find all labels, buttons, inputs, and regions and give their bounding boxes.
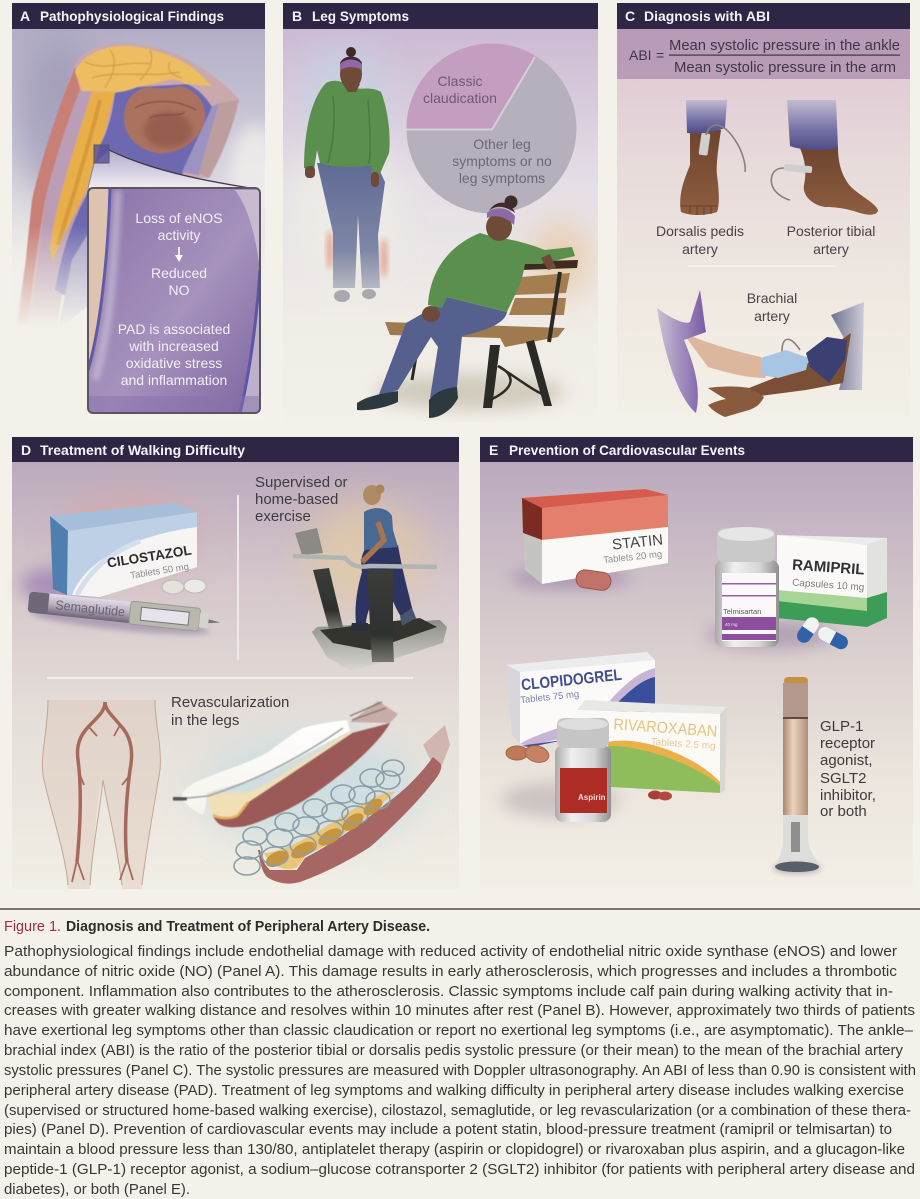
label: brachial artery: artery [754,308,790,324]
illustration: clopidogrel box [506,652,655,765]
formula: ABI: = [656,47,664,63]
caption body: creases with greater walking distance and resolves within 10 minutes after rest (Panel B). However, approximately two thirds of patients [4,1002,915,1019]
heading: panel D: Treatment of Walking Difficulty [40,442,245,458]
heading: panel B [283,3,598,29]
labels: ankle arteries: artery [813,241,849,257]
pie chart: leg symptom share: symptoms or no [452,153,552,169]
pie chart: leg symptom share: claudication [423,90,497,106]
caption body: Pathophysiological findings include endothelial damage with reduced activity of endothelial nitric oxide synthase (eNOS) and lower [4,943,897,960]
illustration: legs with arteries [42,700,160,889]
heading: panel C: Diagnosis with ABI [644,8,770,24]
illustration: bench [385,260,578,408]
labels: ankle arteries: Posterior tibial [787,223,875,239]
label: brachial artery [747,290,797,324]
text: inset pathway: with increased [128,338,219,354]
text: inset pathway: PAD is associated [118,321,230,337]
heading: panel E: E [489,442,498,458]
caption body: maintain a blood pressure less than 130/80, antiplatelet therapy (aspirin or clopidogrel) or rivaroxaban plus aspirin, and a glucagon-like [4,1141,905,1158]
illustration: standing woman walking [304,47,390,302]
illustration: injection pen [773,677,821,874]
illustration: cilostazol box: CILOSTAZOL [106,542,193,571]
caption body [4,943,916,1198]
illustration: cilostazol box: Tablets 50 mg [130,561,190,582]
caption body: have exertional leg symptoms other than classic claudication or report no exertional leg symptoms (i.e., are asymptomatic). The ankle– [4,1022,914,1039]
text: inset pathway [118,210,230,388]
heading: panel C [617,3,910,29]
illustration: clopidogrel box: Tablets 75 mg [520,689,580,706]
labels: ankle arteries [656,223,875,257]
pie chart: leg symptom share: leg symptoms [459,170,545,186]
heading: panel B: Leg Symptoms [312,8,409,24]
illustration: rivaroxaban box: Tablets 2.5 mg [650,737,716,752]
panel: E prevention of cardiovascular events [480,437,913,889]
label: exercise: exercise [255,508,311,525]
text: inset pathway: Reduced [151,265,207,281]
illustration: clopidogrel box: CLOPIDOGREL [520,667,623,694]
caption body: component. Inflammation also contributes to the atherosclerosis. Classic symptoms include calf pain during walking activity that in- [4,983,893,1000]
heading: panel A [12,3,265,29]
text: inset pathway: and inflammation [121,372,227,388]
caption body: systolic pressures (Panel C). The systolic pressures are measured with Doppler ultrasonography. An ABI of less than 0.90 is consistent with [4,1062,916,1079]
callout: magnified inset [88,188,260,413]
illustration: statin box: Tablets 20 mg [603,549,663,566]
illustration: dorsalis pedis ankle [680,100,745,215]
caption body: brachial index (ABI) is the ratio of the posterior tibial or dorsalis pedis systolic pressure (or their mean) to the mean of the brachial artery [4,1042,903,1059]
caption body: (supervised or structured home-based walking exercise), cilostazol, semaglutide, or leg revascularization (or a combination of these thera- [4,1102,911,1119]
label: GLP-1: SGLT2 [820,770,866,787]
heading: panel E: Prevention of Cardiovascular Events [509,442,745,458]
label: GLP-1: receptor [820,735,875,752]
illustration: telmisartan bottle: 40 mg [725,622,738,627]
illustration: ramipril box [777,535,887,627]
illustration: semaglutide pen: Semaglutide [55,597,126,619]
illustration: aspirin bottle [555,718,611,822]
label: revascularization [171,694,289,729]
illustration: aspirin bottle: Aspirin [578,793,606,802]
illustration: brachial cuff measurement [657,290,864,417]
illustration: treadmill with woman [293,484,447,671]
label: brachial artery: Brachial [747,290,797,306]
text: inset pathway: oxidative stress [126,355,222,371]
label: revascularization: Revascularization [171,694,289,711]
labels: ankle arteries: Dorsalis pedis [656,223,744,239]
caption body: peptide-1 (GLP-1) receptor agonist, a sodium–glucose cotransporter 2 (SGLT2) inhibitor (for patients with peripheral artery disease and [4,1161,915,1178]
label: GLP-1: or both [820,803,867,820]
caption body: peripheral artery disease (PAD). Treatment of leg symptoms and walking difficulty in peripheral artery disease includes walking exercise [4,1082,904,1099]
formula: ABI [617,29,910,79]
caption body: abundance of nitric oxide (NO) (Panel A). This damage results in early atherosclerosis, which progresses and includes a thrombotic [4,963,898,980]
label: GLP-1 [820,718,876,820]
formula: ABI: Mean systolic pressure in the arm [674,60,896,76]
panel: B leg symptoms [283,3,598,422]
illustration: cilostazol box [50,503,206,597]
icon: capsules [794,615,850,652]
text: inset pathway: activity [158,227,200,243]
heading: panel E [480,437,913,462]
illustration: rivaroxaban box [577,700,727,800]
caption title: Figure 1. [4,918,61,935]
pie chart: leg symptom share: Classic [437,73,483,89]
text: inset pathway: NO [168,282,190,298]
caption body: diabetes), or both (Panel E). [4,1181,190,1198]
illustration: telmisartan bottle [715,527,779,647]
heading: panel A: A [20,8,30,24]
illustration: telmisartan bottle: Telmisartan [723,607,761,616]
label: GLP-1: GLP-1 [820,718,863,735]
labels: ankle arteries: artery [682,241,718,257]
pie chart: leg symptom share: Other leg [473,136,531,152]
illustration: artery with plaque and thrombus [12,39,265,320]
illustration: statin box [522,489,668,591]
heading: panel D [12,437,459,462]
formula: ABI: Mean systolic pressure in the ankle [669,38,900,54]
caption body: pies) (Panel D). Prevention of cardiovascular events may include a potent statin, blood-pressure treatment (ramipril or telmisartan) to [4,1121,892,1138]
pie chart: leg symptom share [406,44,576,214]
illustration: semaglutide pen [27,590,222,639]
caption title: Diagnosis and Treatment of Peripheral Artery Disease. [66,918,430,935]
panel: D treatment of walking difficulty [12,437,459,889]
illustration: stent in artery [234,725,450,884]
heading: panel C: C [625,8,635,24]
heading: panel B: B [292,8,302,24]
label: GLP-1: inhibitor, [820,787,876,804]
illustration: posterior tibial ankle [771,100,878,215]
heading: panel A: Pathophysiological Findings [40,8,224,24]
illustration: seated woman resting [357,196,575,418]
figure caption [4,918,916,1198]
label: exercise: home-based [255,491,338,508]
illustration: rivaroxaban box: RIVAROXABAN [613,716,718,741]
heading: panel D: D [21,442,31,458]
illustration: ramipril box: RAMIPRIL [792,557,865,579]
illustration: ramipril box: Capsules 10 mg [792,577,865,594]
label: revascularization: in the legs [171,712,239,729]
text: inset pathway: Loss of eNOS [135,210,223,226]
illustration: balloon angioplasty [173,701,398,827]
label: exercise [255,474,348,525]
panel: A pathophysiological findings [12,3,280,422]
illustration: statin box: STATIN [611,531,664,554]
formula: ABI: ABI [629,47,652,63]
label: exercise: Supervised or [255,474,348,491]
label: GLP-1: agonist, [820,752,873,769]
panel: C diagnosis with ABI [617,3,910,422]
